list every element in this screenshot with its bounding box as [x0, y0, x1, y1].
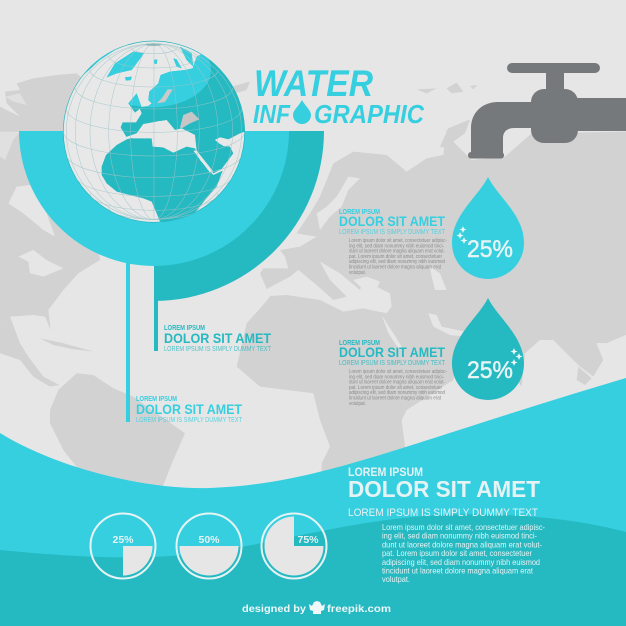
title: INF: [253, 99, 291, 129]
icon: faucet: [468, 63, 626, 158]
globe: [63, 40, 245, 222]
pie chart: 50%: 50%: [198, 534, 220, 546]
text block: large on wave: DOLOR SIT AMET: [348, 476, 541, 502]
light half ring: [19, 131, 289, 266]
text block: lower centre: volutpat.: [349, 401, 366, 407]
text block: upper centre: Lorem ipsum dolor sit amet, consectetuer adipisc-: [349, 238, 447, 244]
text block: lower centre: [339, 338, 447, 407]
text block: lower centre: ing elit, sed diam nonummy nibh euismod tinci-: [349, 374, 444, 380]
world map: [0, 73, 626, 500]
text block: large on wave: pat. Lorem ipsum dolor sit amet, consectetuer: [382, 548, 532, 558]
text block: lower centre: dunt ut laoreet dolore magna aliquam erat volut-: [349, 380, 445, 386]
pie chart: 75%: 75%: [297, 534, 319, 546]
connector bar: dark: [154, 295, 158, 351]
drop: lower 25%: [452, 298, 524, 400]
text block: dark bar label: DOLOR SIT AMET: [164, 330, 271, 346]
text block: large on wave: dunt ut laoreet dolore magna aliquam erat volut-: [382, 539, 542, 549]
text block: large on wave: LOREM IPSUM: [348, 465, 423, 479]
text block: large on wave: Lorem ipsum dolor sit amet, consectetuer adipisc-: [382, 522, 545, 532]
text block: large on wave: [348, 465, 545, 584]
text block: upper centre: dunt ut laoreet dolore magna aliquam erat volut-: [349, 249, 445, 255]
text block: large on wave: ing elit, sed diam nonummy nibh euismod tinci-: [382, 531, 537, 541]
text block: large on wave: adipiscing elit, sed diam nonummy nibh euismod: [382, 557, 540, 567]
pie chart: 25%: 25%: [112, 534, 134, 546]
text block: large on wave: tincidunt ut laoreet dolore magna aliquam erat: [382, 566, 534, 576]
icon: title water drop: [293, 100, 311, 124]
text block: dark bar label: [164, 323, 272, 353]
bottom wave: light: [0, 378, 626, 626]
pie chart: 50%: [176, 514, 242, 578]
text block: upper centre: DOLOR SIT AMET: [339, 213, 445, 229]
connector bar: light: [126, 260, 130, 422]
footer credit: [242, 601, 391, 615]
text block: dark bar label: LOREM IPSUM IS SIMPLY DUMMY TEXT: [164, 346, 272, 353]
text block: lower centre: adipiscing elit, sed diam nonummy nibh euismod: [349, 390, 445, 396]
title: WATER: [254, 63, 373, 104]
text block: lower centre: LOREM IPSUM IS SIMPLY DUMMY TEXT: [339, 360, 446, 367]
text block: large on wave: LOREM IPSUM IS SIMPLY DUMMY TEXT: [348, 507, 538, 519]
text block: large on wave: volutpat.: [382, 574, 410, 584]
text block: lower centre: pat. Lorem ipsum dolor sit amet, consectetuer: [349, 385, 442, 391]
text block: light bar label: LOREM IPSUM: [136, 394, 177, 403]
text block: lower centre: DOLOR SIT AMET: [339, 344, 445, 360]
pie chart: 25%: [90, 514, 156, 578]
text block: upper centre: adipiscing elit, sed diam nonummy nibh euismod: [349, 259, 445, 265]
footer credit: freepik.com: [327, 603, 391, 615]
text block: upper centre: pat. Lorem ipsum dolor sit amet, consectetuer: [349, 254, 442, 260]
text block: upper centre: LOREM IPSUM IS SIMPLY DUMMY TEXT: [339, 229, 446, 236]
text block: light bar label: LOREM IPSUM IS SIMPLY DUMMY TEXT: [136, 417, 243, 424]
drop: top 25%: 25%: [467, 236, 513, 263]
bottom wave: dark: [0, 514, 626, 626]
text block: upper centre: LOREM IPSUM: [339, 207, 380, 216]
text block: light bar label: DOLOR SIT AMET: [136, 401, 242, 417]
text block: upper centre: ing elit, sed diam nonummy nibh euismod tinci-: [349, 243, 444, 249]
text block: dark bar label: LOREM IPSUM: [164, 323, 205, 332]
pie chart: 75%: [262, 514, 326, 578]
footer credit: designed by: [242, 603, 306, 615]
drop: lower 25%: 25%: [467, 357, 513, 384]
outer dark quarter ring: [154, 131, 324, 301]
text block: upper centre: volutpat.: [349, 270, 366, 276]
drop: top 25%: [452, 177, 524, 279]
title: GRAPHIC: [314, 99, 425, 129]
text block: upper centre: [339, 207, 447, 276]
text block: lower centre: LOREM IPSUM: [339, 338, 380, 347]
text block: upper centre: tincidunt ut laoreet dolore magna aliquam erat: [349, 264, 442, 270]
text block: lower centre: Lorem ipsum dolor sit amet, consectetuer adipisc-: [349, 369, 447, 375]
title: [253, 63, 425, 129]
text block: light bar label: [136, 394, 243, 424]
text block: lower centre: tincidunt ut laoreet dolore magna aliquam erat: [349, 396, 442, 402]
